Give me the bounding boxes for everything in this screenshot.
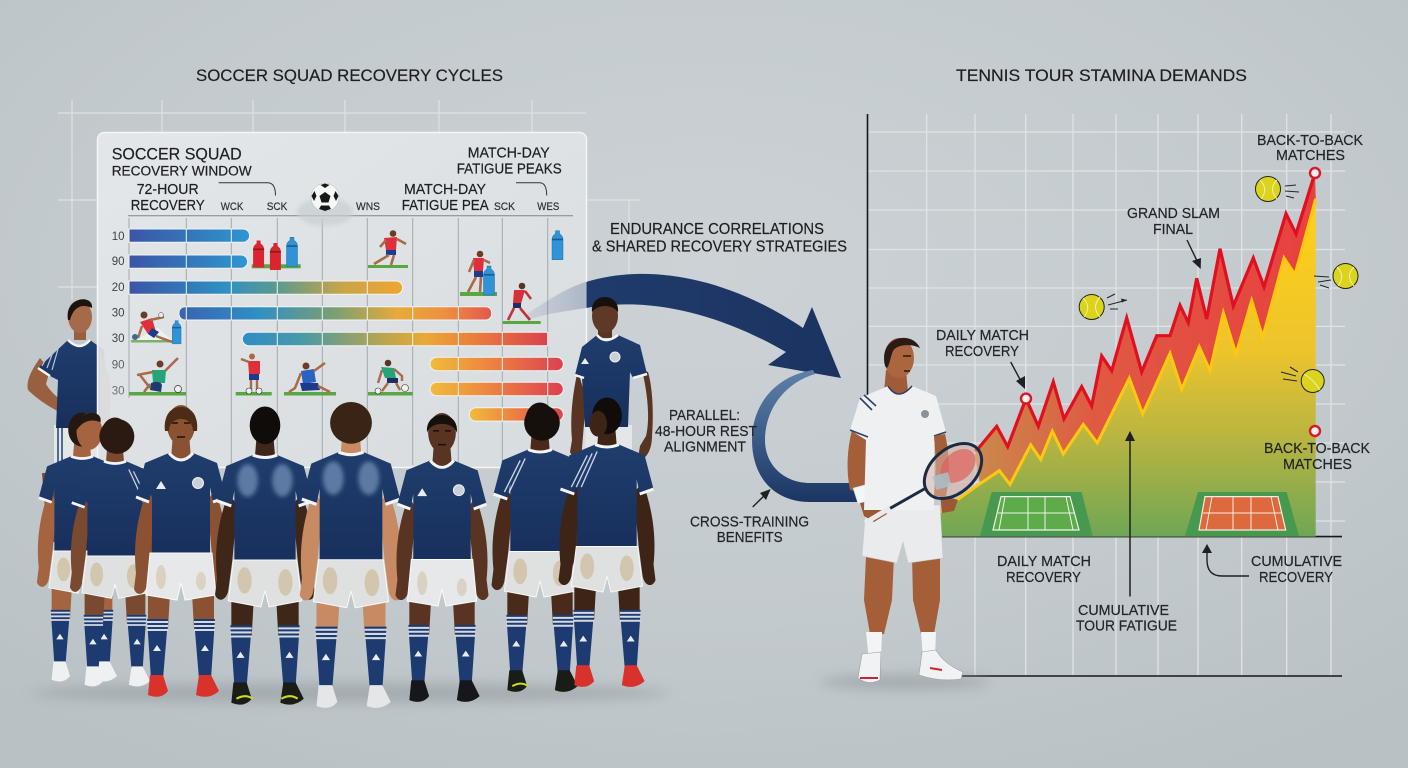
label: cumulative tour fatigue: TOUR FATIGUE <box>1076 618 1177 634</box>
legs <box>864 556 940 634</box>
soccer player 4: front long hair <box>134 405 228 697</box>
chart axes <box>868 114 1342 676</box>
column labels: WES <box>537 201 559 213</box>
neck and head <box>884 370 908 398</box>
column labels: WCK <box>221 201 244 213</box>
label: match-day fatigue peaks (upper) <box>457 146 562 178</box>
right arm <box>934 434 949 496</box>
label: endurance correlations: ENDURANCE CORRELATIONS <box>610 221 824 238</box>
icon: tennis ball <box>1256 176 1299 202</box>
gantt bars <box>129 229 563 421</box>
label: back-to-back matches lower: MATCHES <box>1283 457 1352 473</box>
arrow: grand slam <box>1187 240 1201 269</box>
bracket: 72-hour <box>219 183 276 196</box>
marker: back-to-back peak <box>1310 168 1320 178</box>
label: 72-hour recovery: 72-HOUR <box>137 181 199 198</box>
row labels: 10 <box>112 231 124 243</box>
label: cross-training benefits: BENEFITS <box>717 530 783 546</box>
arrow: parallel rest loop <box>752 370 860 502</box>
label: cumulative recovery: CUMULATIVE <box>1251 554 1342 570</box>
label: daily match recovery top: DAILY MATCH <box>936 328 1029 344</box>
area: red fatigue band <box>975 173 1316 484</box>
label: daily match recovery top: RECOVERY <box>945 344 1019 360</box>
label: back-to-back matches top: BACK-TO-BACK <box>1257 133 1363 149</box>
shirt <box>850 386 946 510</box>
label: match-day fatigue peaks (upper): MATCH-DAY <box>468 146 550 162</box>
label: match-day fatigue peaks (upper): FATIGUE PEAKS <box>457 162 562 178</box>
soccer player 8: back curly side <box>491 403 589 692</box>
icon: player blue sitting <box>284 362 336 396</box>
label: daily match recovery top <box>936 328 1029 360</box>
marker: daily match peak <box>1021 394 1031 404</box>
soccer player 5: back short hair <box>215 406 315 705</box>
label: endurance correlations <box>592 221 847 256</box>
label: parallel rest alignment: 48-HOUR REST <box>655 424 757 440</box>
soccer player: standing behind right <box>570 297 653 470</box>
icon: tennis ball <box>1314 264 1358 288</box>
label: cross-training benefits: CROSS-TRAINING <box>690 515 809 531</box>
label: grand slam final: FINAL <box>1153 222 1193 238</box>
label: daily match recovery bottom <box>997 554 1091 586</box>
row labels: 30 <box>112 333 124 345</box>
soccer player 3: curly back <box>70 418 160 686</box>
row labels: 90 <box>112 256 124 268</box>
soccer player 6: back curly hair <box>300 402 402 708</box>
line: red fatigue <box>975 173 1315 451</box>
ground shadow: tennis player <box>820 675 990 689</box>
column labels: SCK <box>494 201 516 213</box>
label: cumulative tour fatigue: CUMULATIVE <box>1078 603 1169 619</box>
title: soccer: SOCCER SQUAD RECOVERY CYCLES <box>196 66 503 85</box>
label: grand slam final <box>1127 206 1220 238</box>
row labels: 30 <box>112 308 124 320</box>
row labels: 20 <box>112 282 124 294</box>
icon: player jogging <box>503 283 541 324</box>
icon: tennis ball <box>1079 294 1127 320</box>
label: cumulative recovery <box>1251 554 1342 586</box>
icon: clay court <box>1185 492 1299 536</box>
icon: tennis ball <box>1281 367 1324 392</box>
icon: bottles <box>252 237 301 270</box>
area: cumulative fatigue <box>938 199 1316 537</box>
icon: player green stretching <box>129 358 186 396</box>
arrow: cross-training <box>753 489 771 507</box>
panel: recovery window chart <box>98 132 586 468</box>
icon: player green kicking <box>368 360 413 396</box>
label: cumulative tour fatigue <box>1076 603 1177 634</box>
icon: player running <box>368 230 408 268</box>
row labels <box>112 231 124 397</box>
bracket: match-day <box>516 183 547 196</box>
label: daily match recovery bottom: RECOVERY <box>1006 570 1081 586</box>
row labels: 30 <box>112 385 124 397</box>
label: back-to-back matches lower: BACK-TO-BACK <box>1264 441 1370 457</box>
column labels: SCK <box>267 201 288 213</box>
shorts <box>862 505 943 563</box>
label: back-to-back matches top <box>1257 133 1363 164</box>
arrow: cumulative recovery <box>1202 544 1249 576</box>
label: 72-hour recovery <box>131 181 205 214</box>
icon: player sliding with bottle <box>131 312 181 344</box>
label: daily match recovery bottom: DAILY MATCH <box>997 554 1091 570</box>
socks <box>866 632 936 660</box>
arrow: endurance correlation <box>528 274 841 378</box>
column labels <box>221 201 559 213</box>
label: parallel rest alignment: PARALLEL: <box>669 408 740 424</box>
arrow: cumulative tour fatigue <box>1125 431 1135 596</box>
chart: tennis stamina <box>868 114 1370 676</box>
title: tennis: TENNIS TOUR STAMINA DEMANDS <box>956 66 1247 85</box>
soccer player 2: left side-on <box>37 413 127 681</box>
icon: soccer ball <box>297 183 353 226</box>
ground shadow: team <box>30 683 670 703</box>
label: grand slam final: GRAND SLAM <box>1127 206 1220 222</box>
label: cross-training benefits <box>690 515 809 546</box>
row labels: 90 <box>112 359 124 371</box>
label: parallel rest alignment <box>655 408 757 456</box>
label: match-day fatigue peaks (clipped): FATIGUE PEA <box>402 197 489 214</box>
tennis player <box>848 338 992 683</box>
label: match-day fatigue peaks (clipped) <box>402 181 489 214</box>
icon: green court <box>980 492 1093 536</box>
label: back-to-back matches lower <box>1264 441 1370 473</box>
arrow: daily match <box>1011 362 1025 389</box>
racket <box>865 433 992 523</box>
label: back-to-back matches top: MATCHES <box>1276 148 1345 164</box>
label: 72-hour recovery: RECOVERY <box>131 197 205 214</box>
panel heading: RECOVERY WINDOW <box>112 163 252 179</box>
icon: bottle top right <box>552 231 563 260</box>
label: endurance correlations: & SHARED RECOVERY STRATEGIES <box>592 239 847 256</box>
soccer player 9: back side right <box>558 398 656 687</box>
label: cumulative recovery: RECOVERY <box>1259 570 1333 586</box>
panel heading <box>112 144 252 179</box>
line: yellow recovery <box>938 199 1316 513</box>
soccer player 7: front <box>395 413 489 702</box>
icon: player red standing <box>236 354 272 396</box>
shoes <box>858 652 881 683</box>
left arm <box>848 430 874 494</box>
soccer player: back left standing <box>28 299 110 554</box>
marker: back-to-back lower <box>1310 426 1320 436</box>
icon: player with bottle <box>460 251 497 296</box>
label: match-day fatigue peaks (clipped): MATCH-DAY <box>404 181 486 198</box>
panel heading: SOCCER SQUAD <box>112 144 242 163</box>
column labels: WNS <box>356 201 380 213</box>
label: parallel rest alignment: ALIGNMENT <box>664 440 746 456</box>
